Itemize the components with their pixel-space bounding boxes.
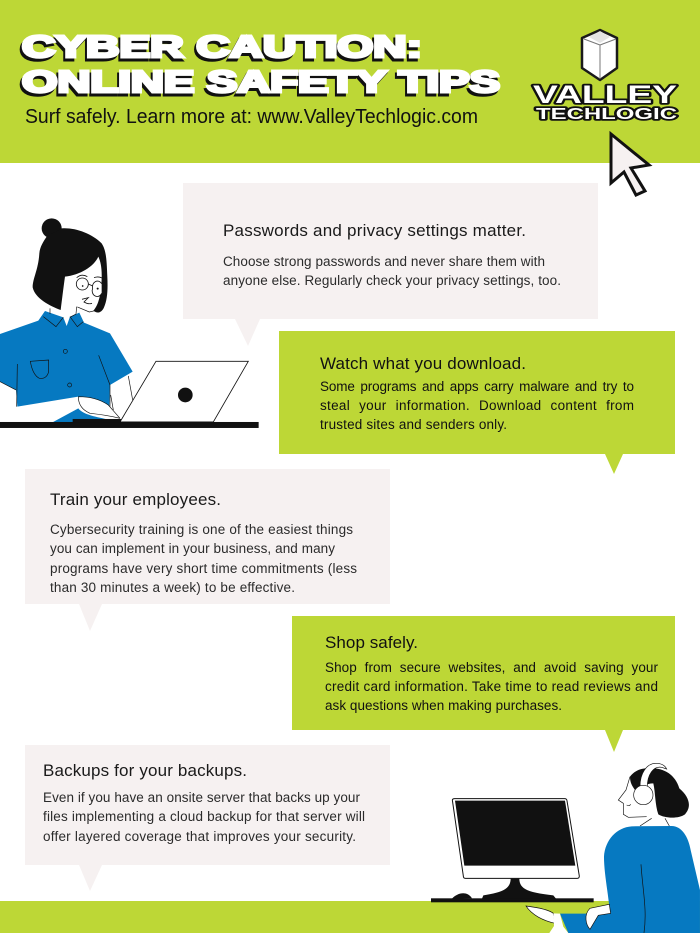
panel: training: programs have very short time commitments (less xyxy=(50,561,357,576)
icon: cursor arrow xyxy=(611,134,649,195)
sweater xyxy=(560,826,700,933)
panel: training: you can implement in your business, and many xyxy=(50,541,335,556)
panel: backups: Even if you have an onsite server that backs up your xyxy=(43,790,360,805)
desk xyxy=(431,898,594,902)
panel: shopping: Shop from secure websites, and avoid saving your xyxy=(325,660,658,675)
head and hair xyxy=(33,218,108,317)
panel: passwords xyxy=(183,183,598,346)
shirt xyxy=(0,311,133,407)
panel: downloads xyxy=(279,331,675,474)
logo: Valley Techlogic: VALLEY xyxy=(533,81,677,109)
glasses xyxy=(76,275,102,304)
title: ONLINE SAFETY TIPS xyxy=(20,67,498,102)
header band xyxy=(0,0,700,163)
panel: downloads: trusted sites and senders only. xyxy=(320,417,507,432)
illustration: woman at laptop xyxy=(0,218,259,428)
icon: logo cube xyxy=(582,30,617,80)
panel: training: than 30 minutes a week) to be effective. xyxy=(50,580,295,595)
panel: backups: files implementing a cloud backup for that server will xyxy=(43,809,365,824)
panel: downloads: Watch what you download. xyxy=(320,354,526,373)
logo: Valley Techlogic xyxy=(533,30,677,123)
subtitle: Surf safely. Learn more at: www.ValleyTechlogic.com xyxy=(25,106,478,128)
title: CYBER CAUTION: xyxy=(22,29,422,64)
panel: downloads: steal your information. Download content from xyxy=(320,398,634,413)
mouse xyxy=(452,893,472,899)
laptop xyxy=(120,361,248,422)
panel: passwords: Passwords and privacy settings matter. xyxy=(223,221,526,240)
monitor xyxy=(452,799,579,878)
panel: backups: offer layered coverage that improves your security. xyxy=(43,829,356,844)
desk xyxy=(0,422,259,428)
logo: Valley Techlogic: TECHLOGIC xyxy=(536,106,677,123)
panel: shopping: ask questions when making purchases. xyxy=(325,698,562,713)
footer band xyxy=(0,901,700,933)
panel: shopping xyxy=(292,616,675,752)
panel: passwords: anyone else. Regularly check your privacy settings, too. xyxy=(223,273,561,288)
monitor stand xyxy=(482,879,556,899)
panel: training: Cybersecurity training is one of the easiest things xyxy=(50,522,353,537)
illustration: man at monitor xyxy=(431,763,700,933)
panel: shopping: Shop safely. xyxy=(325,633,418,652)
panel: passwords: Choose strong passwords and never share them with xyxy=(223,254,545,269)
panel: backups xyxy=(25,745,390,891)
title xyxy=(20,29,500,102)
hands xyxy=(526,906,555,923)
panel: backups: Backups for your backups. xyxy=(43,761,247,780)
title: ONLINE SAFETY TIPS xyxy=(22,64,500,99)
panel: training xyxy=(25,469,390,631)
shirt details xyxy=(0,317,133,418)
panel: shopping: credit card information. Take time to read reviews and xyxy=(325,679,658,694)
panel: downloads: Some programs and apps carry malware and try to xyxy=(320,379,634,394)
panel: training: Train your employees. xyxy=(50,490,221,509)
title: CYBER CAUTION: xyxy=(20,32,420,67)
head, hair and headphones xyxy=(618,763,689,826)
